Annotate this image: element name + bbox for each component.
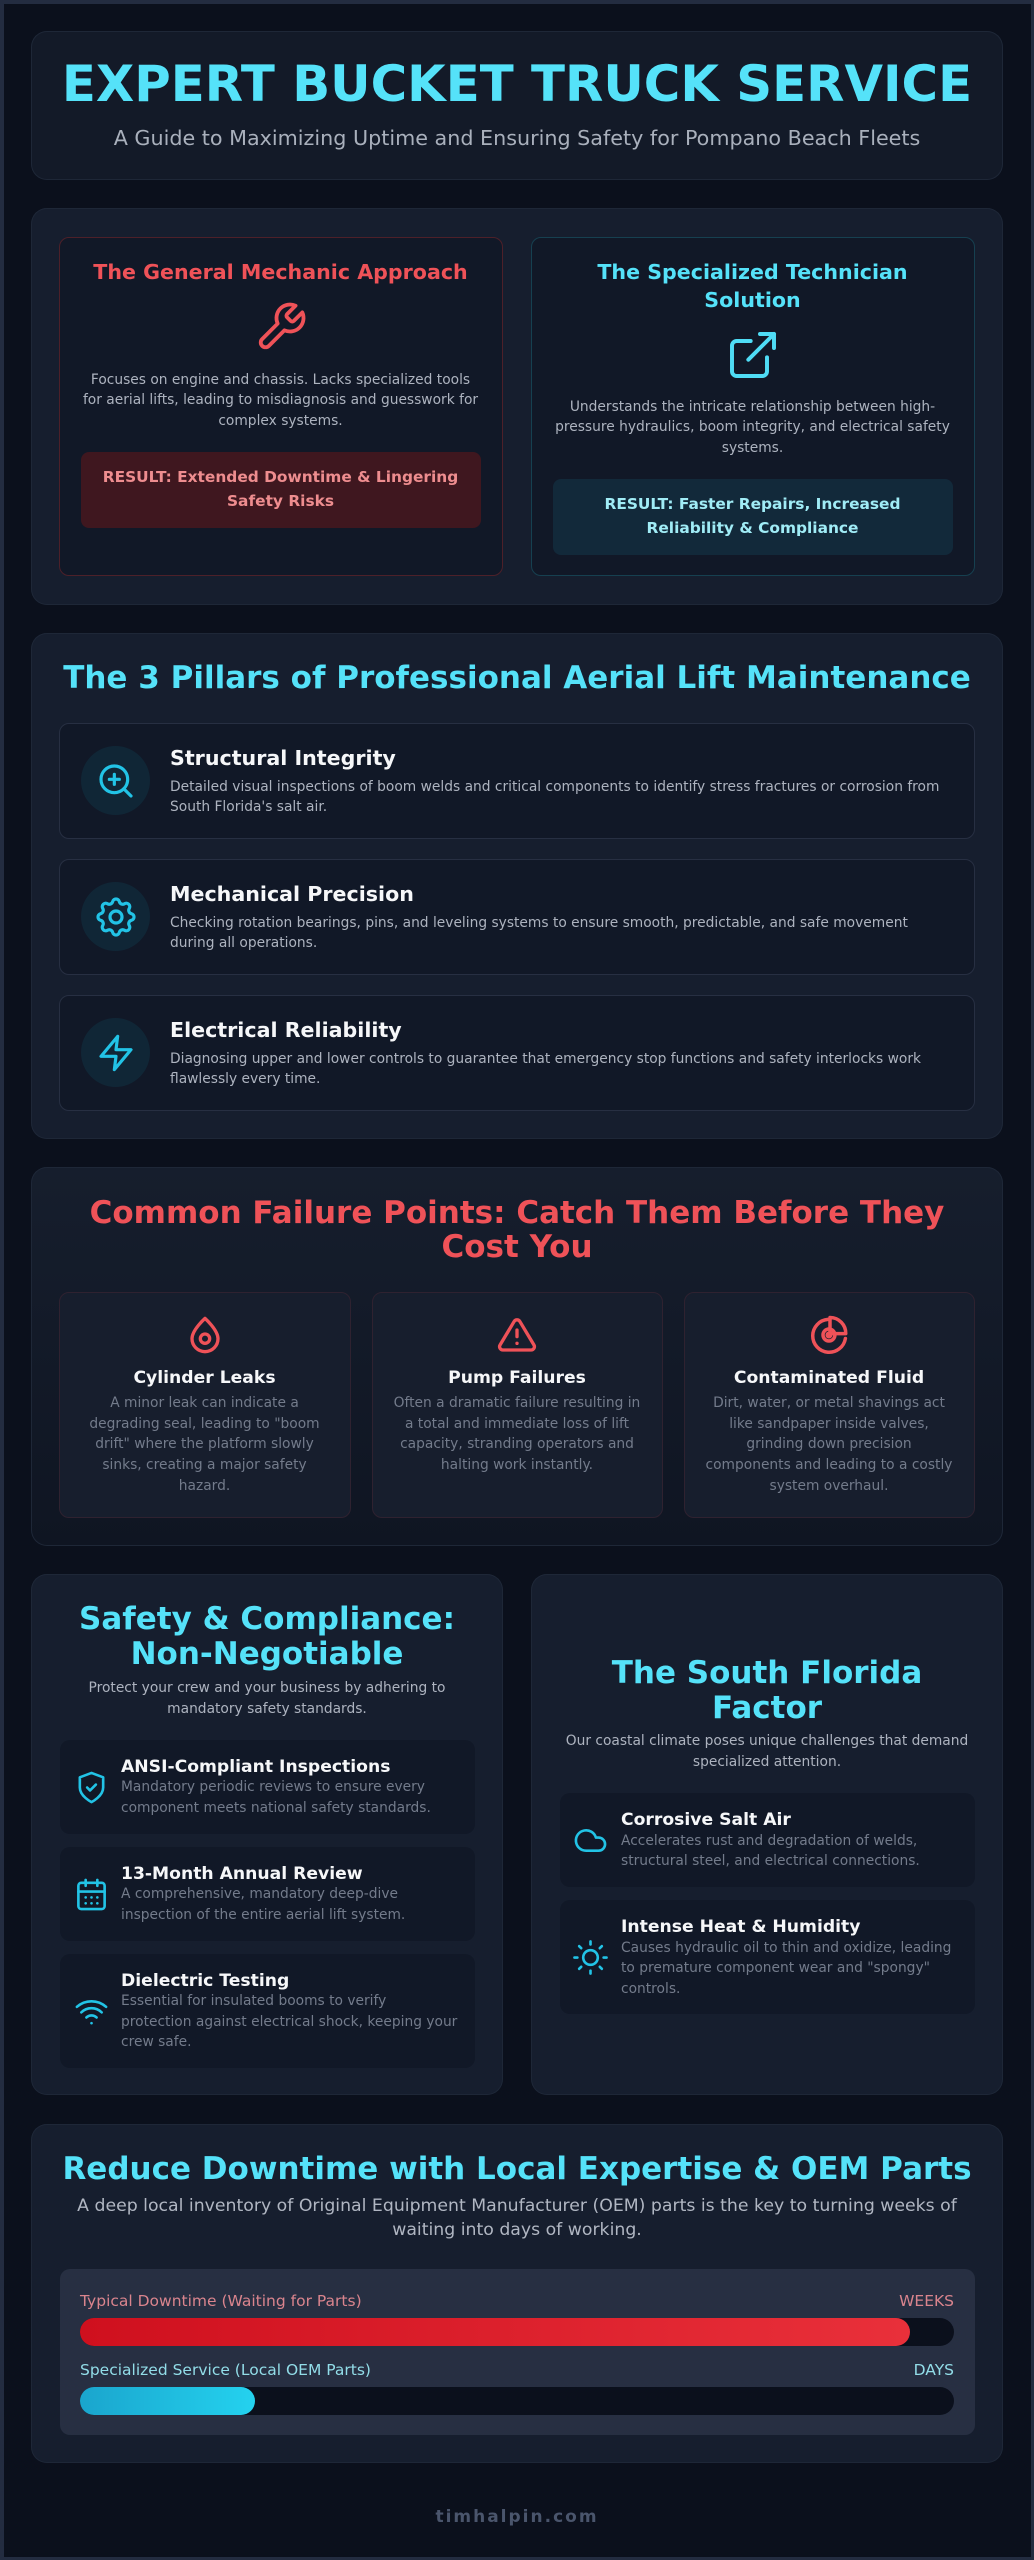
- pillar text: Diagnosing upper and lower controls to guarantee that emergency stop functions and safety interlocks work: [170, 1050, 921, 1066]
- icon: target and wedge: [810, 1316, 848, 1354]
- label: typical downtime: WEEKS: [899, 2292, 954, 2310]
- card title: Cylinder Leaks: [133, 1368, 276, 1388]
- heading: specialized technician: The Specialized Technician: [597, 260, 908, 284]
- heading: failure points: [90, 1194, 944, 1265]
- card body: A minor leak can indicate a: [110, 1395, 299, 1411]
- panel: approach comparison: [31, 208, 1003, 605]
- footer: timhalpin.com: [435, 2507, 599, 2527]
- item: ANSI inspections: [60, 1740, 475, 1834]
- pillar: electrical reliability: [59, 995, 975, 1111]
- card: cylinder leaks: [59, 1292, 351, 1518]
- result text: Reliability & Compliance: [646, 519, 858, 537]
- card body: sinks, creating a major safety: [102, 1457, 307, 1473]
- subtitle: A Guide to Maximizing Uptime and Ensuring Safety for Pompano Beach Fleets: [114, 126, 920, 150]
- heading: specialized technician: Solution: [704, 288, 801, 312]
- intro: safety: [89, 1680, 445, 1717]
- pillar text: Structural Integrity: [170, 746, 396, 770]
- card body: [706, 1395, 952, 1494]
- icon: shield check: [78, 1772, 104, 1804]
- panel: south florida factor: [531, 1574, 1003, 2095]
- header panel: [31, 31, 1003, 180]
- item text: structural steel, and electrical connections.: [621, 1853, 920, 1869]
- intro: safety: Protect your crew and your business by adhering to: [89, 1680, 445, 1696]
- heading: failure points: Common Failure Points: Catch Them Before They: [90, 1194, 944, 1230]
- label: specialized service: Specialized Service (Local OEM Parts): [80, 2361, 371, 2379]
- card body: Dirt, water, or metal shavings act: [713, 1395, 945, 1411]
- intro: reduce downtime: waiting into days of working.: [392, 2220, 642, 2240]
- description: general mechanic: complex systems.: [218, 413, 343, 429]
- bar: specialized service: [80, 2387, 954, 2415]
- item text: [621, 1917, 951, 1997]
- item text: [121, 1971, 458, 2050]
- item text: inspection of the entire aerial lift system.: [121, 1907, 405, 1923]
- icon: droplet: [190, 1316, 220, 1354]
- panel: 3 pillars: [31, 633, 1003, 1139]
- label: typical downtime: [80, 2292, 954, 2310]
- pillar text: during all operations.: [170, 935, 317, 951]
- heading: reduce downtime: Reduce Downtime with Local Expertise & OEM Parts: [62, 2151, 972, 2187]
- icon: zoom in: [81, 746, 150, 815]
- item: dielectric testing: [60, 1954, 475, 2068]
- result: downtime: [80, 452, 480, 528]
- card body: grinding down precision: [746, 1436, 912, 1452]
- item text: 13-Month Annual Review: [121, 1864, 363, 1884]
- heading: general mechanic: The General Mechanic Approach: [93, 260, 468, 284]
- panel: common failure points: [31, 1167, 1003, 1546]
- item text: component meets national safety standards.: [121, 1800, 431, 1816]
- result text: [103, 468, 458, 510]
- icon: wrench: [258, 302, 306, 350]
- intro: south florida: [566, 1733, 968, 1770]
- icon: cloud: [574, 1829, 606, 1852]
- item text: Corrosive Salt Air: [621, 1810, 791, 1830]
- pillar: structural integrity: [59, 723, 975, 839]
- icon: sun: [573, 1940, 608, 1975]
- heading: south florida: The South Florida: [612, 1655, 922, 1691]
- card title: Pump Failures: [448, 1368, 586, 1388]
- title: EXPERT BUCKET TRUCK SERVICE: [62, 55, 972, 113]
- item text: ANSI-Compliant Inspections: [121, 1757, 390, 1777]
- heading: safety: Safety & Compliance:: [79, 1601, 455, 1637]
- intro: south florida: Our coastal climate poses unique challenges that demand: [566, 1733, 968, 1749]
- card body: components and leading to a costly: [706, 1457, 952, 1473]
- heading: failure points: Cost You: [441, 1229, 593, 1265]
- pillar text: Checking rotation bearings, pins, and leveling systems to ensure smooth, predictable, and safe movement: [170, 914, 908, 930]
- icon: calendar: [77, 1878, 106, 1910]
- description: general mechanic: Focuses on engine and chassis. Lacks specialized tools: [91, 372, 470, 388]
- heading: safety: [79, 1601, 455, 1672]
- card: general mechanic: [59, 237, 503, 576]
- pillar text: flawlessly every time.: [170, 1071, 320, 1087]
- chart: downtime comparison: [60, 2269, 975, 2435]
- item text: Dielectric Testing: [121, 1971, 289, 1991]
- description: specialized technician: pressure hydraulics, boom integrity, and electrical safety: [555, 419, 950, 435]
- bar: typical downtime: [80, 2318, 954, 2346]
- icon: warning triangle: [498, 1318, 536, 1352]
- pillar: mechanical precision: [59, 859, 975, 975]
- description: specialized technician: Understands the intricate relationship between high-: [570, 398, 935, 414]
- label: specialized service: [80, 2361, 954, 2379]
- item: annual review: [60, 1847, 475, 1941]
- item text: Intense Heat & Humidity: [621, 1917, 860, 1937]
- card body: halting work instantly.: [441, 1457, 593, 1473]
- heading: south florida: Factor: [712, 1690, 822, 1726]
- card body: [394, 1395, 640, 1473]
- description: specialized technician: systems.: [722, 440, 783, 456]
- pillar text: South Florida's salt air.: [170, 799, 327, 815]
- heading: pillars: The 3 Pillars of Professional Aerial Lift Maintenance: [63, 660, 971, 696]
- card body: [89, 1395, 320, 1494]
- label: specialized service: DAYS: [914, 2361, 954, 2379]
- heading: south florida: [612, 1655, 922, 1726]
- card body: drift" where the platform slowly: [95, 1436, 314, 1452]
- card body: hazard.: [179, 1478, 230, 1494]
- item: corrosive salt air: [560, 1793, 975, 1887]
- card body: capacity, stranding operators and: [400, 1436, 634, 1452]
- pillar text: [170, 882, 908, 951]
- card: contaminated fluid: [684, 1292, 975, 1518]
- icon: external link: [730, 332, 776, 378]
- result text: [604, 494, 901, 537]
- card: specialized technician: [531, 237, 975, 576]
- card: pump failures: [372, 1292, 663, 1518]
- pillar text: Detailed visual inspections of boom welds and critical components to identify stress fractures or corrosion from: [170, 778, 939, 794]
- heading: specialized technician: [597, 260, 908, 312]
- label: typical downtime: Typical Downtime (Waiting for Parts): [80, 2292, 362, 2310]
- description: general mechanic: [83, 372, 478, 429]
- card title: Contaminated Fluid: [734, 1368, 924, 1388]
- item text: [121, 1757, 431, 1816]
- item text: Causes hydraulic oil to thin and oxidize, leading: [621, 1940, 951, 1956]
- card body: system overhaul.: [770, 1478, 888, 1494]
- item text: [121, 1864, 405, 1923]
- item text: Essential for insulated booms to verify: [121, 1993, 386, 2009]
- heading: safety: Non-Negotiable: [131, 1636, 403, 1672]
- card body: Often a dramatic failure resulting in: [394, 1395, 640, 1411]
- icon: wifi: [76, 2000, 108, 2024]
- result text: RESULT: Extended Downtime & Lingering: [103, 468, 458, 486]
- panel: reduce downtime: [31, 2124, 1003, 2463]
- item: heat and humidity: [560, 1900, 975, 2014]
- intro: south florida: specialized attention.: [693, 1754, 841, 1770]
- intro: reduce downtime: [77, 2196, 958, 2240]
- intro: safety: mandatory safety standards.: [167, 1701, 367, 1717]
- result text: Safety Risks: [227, 492, 334, 510]
- icon: lightning bolt: [81, 1018, 150, 1087]
- intro: reduce downtime: A deep local inventory of Original Equipment Manufacturer (OEM) parts is the key to turning weeks of: [77, 2196, 957, 2216]
- result text: RESULT: Faster Repairs, Increased: [604, 494, 901, 512]
- card body: a total and immediate loss of lift: [405, 1416, 629, 1432]
- item text: controls.: [621, 1981, 680, 1997]
- card body: degrading seal, leading to "boom: [89, 1416, 320, 1432]
- pillar text: [170, 1018, 921, 1087]
- item text: A comprehensive, mandatory deep-dive: [121, 1886, 398, 1902]
- item text: Mandatory periodic reviews to ensure every: [121, 1779, 425, 1795]
- item text: Accelerates rust and degradation of welds,: [621, 1832, 917, 1848]
- item text: to premature component wear and "spongy": [621, 1960, 930, 1976]
- pillar text: Electrical Reliability: [170, 1018, 402, 1042]
- item text: protection against electrical shock, keeping your: [121, 2014, 457, 2030]
- result: faster repairs: [552, 479, 952, 555]
- description: specialized technician: [555, 398, 950, 456]
- icon: gear: [81, 882, 150, 951]
- description: general mechanic: for aerial lifts, leading to misdiagnosis and guesswork for: [83, 392, 478, 408]
- item text: crew safe.: [121, 2034, 192, 2050]
- pillar text: Mechanical Precision: [170, 882, 414, 906]
- card body: like sandpaper inside valves,: [729, 1416, 929, 1432]
- pillar text: [170, 746, 939, 815]
- panel: safety and compliance: [31, 1574, 503, 2095]
- item text: [621, 1810, 920, 1869]
